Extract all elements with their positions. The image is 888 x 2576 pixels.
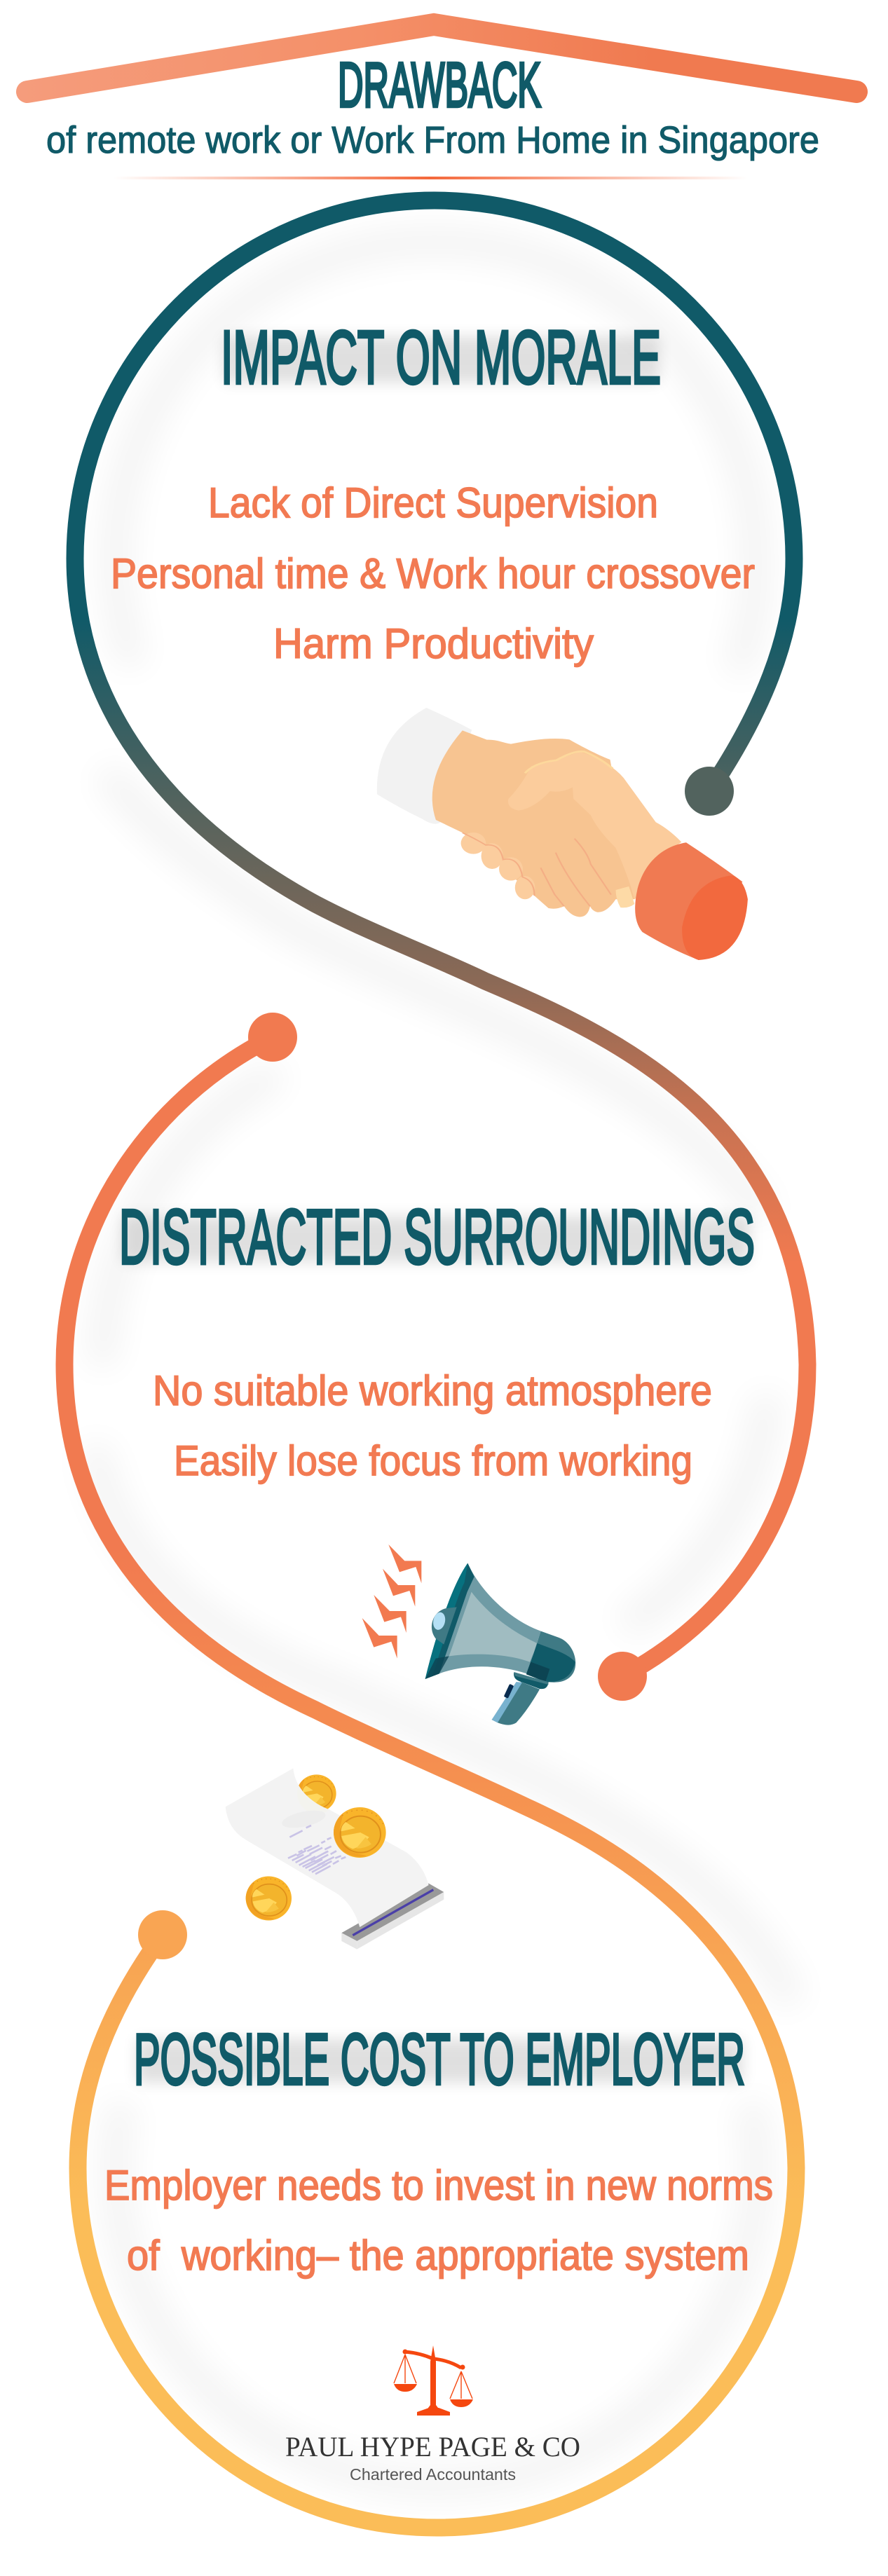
bullet text: Harm Productivity (273, 620, 594, 667)
winding line: orange to yellow (64, 1013, 796, 2528)
tagline: Chartered Accountants (350, 2465, 516, 2483)
icon: scales (394, 2345, 473, 2416)
panel: possible cost to employer (104, 2019, 773, 2279)
winding line: teal to orange (75, 200, 807, 1701)
header: roof, title and subtitle (27, 25, 856, 161)
bullet text: Personal time & Work hour crossover (111, 550, 755, 597)
title: DRAWBACK (338, 50, 541, 121)
bullet text: Easily lose focus from working (174, 1437, 692, 1484)
icon: receipt with coins (226, 1768, 444, 1950)
bullet text: No suitable working atmosphere (153, 1367, 712, 1414)
bullet text: of working– the appropriate system (127, 2232, 749, 2279)
panel: impact on morale (111, 315, 755, 960)
subtitle: of remote work or Work From Home in Singapore (46, 119, 819, 161)
icon: roof (27, 25, 856, 92)
bullet text (153, 1367, 712, 1484)
bullet text: Employer needs to invest in new norms (104, 2162, 773, 2209)
panel: distracted surroundings (119, 1194, 755, 1725)
bullet text (111, 479, 755, 667)
icon: handshake (377, 708, 748, 960)
logo: Paul Hype Page & Co (285, 2345, 580, 2483)
bullet text (104, 2162, 773, 2279)
icon: megaphone (362, 1544, 575, 1725)
bullet text: Lack of Direct Supervision (208, 479, 658, 526)
soft shadows around the winding line (95, 242, 792, 2484)
company name: PAUL HYPE PAGE & CO (285, 2431, 580, 2462)
